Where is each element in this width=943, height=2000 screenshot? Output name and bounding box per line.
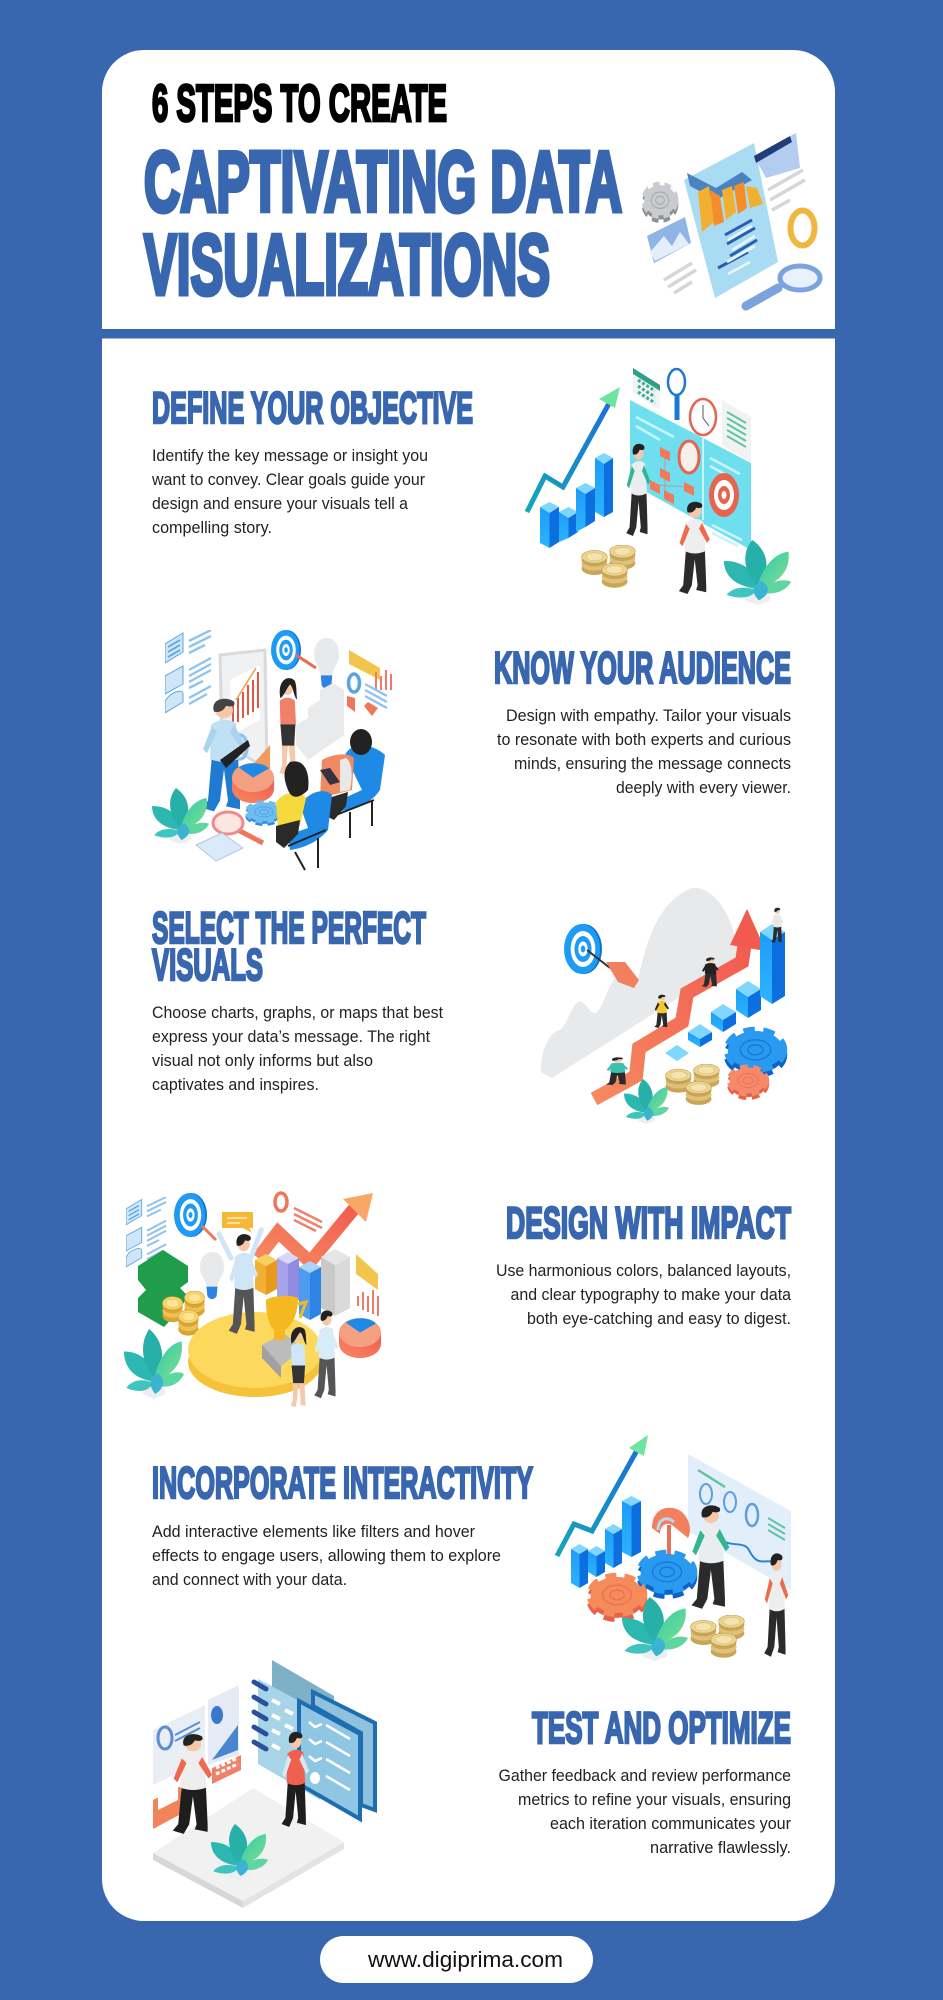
body text: effects to engage users, allowing them to explore [152,1547,501,1565]
bar chart [540,453,613,548]
heading: DEFINE YOUR OBJECTIVE [152,384,473,433]
icon: gear [644,185,676,220]
illustration: achievement podium [124,1193,381,1407]
body text [152,1523,501,1589]
body text: Use harmonious colors, balanced layouts, [496,1262,791,1280]
speech bubble [222,1212,253,1233]
body text: and connect with your data. [152,1571,347,1589]
body text: Choose charts, graphs, or maps that best [152,1004,443,1022]
heading: SELECT THE PERFECT [152,904,426,953]
calendar [212,1755,241,1784]
body text [497,707,791,797]
main title line 2: VISUALIZATIONS [144,218,550,313]
notebook [254,1660,334,1800]
folder [153,1780,181,1829]
dashboard panel [630,400,751,550]
pie chart [339,1318,381,1358]
clock [690,399,716,435]
light bulb [314,638,339,689]
document [722,400,751,462]
trophy [262,1296,306,1378]
panel: step 3 select the perfect visuals [152,888,785,1124]
body text [152,1004,443,1094]
main title line 1: CAPTIVATING DATA [144,135,622,230]
green money stack [138,1250,188,1327]
dashboard board [688,1454,791,1590]
heading [152,904,426,990]
panel: step 5 incorporate interactivity [152,1435,791,1661]
panel: step 6 test and optimize [153,1660,791,1908]
body text: compelling story. [152,519,272,537]
body text: and clear typography to make your data [510,1286,792,1304]
platform [153,1788,344,1908]
body text: visual not only informs but also [152,1052,373,1070]
blue gear [641,1554,693,1595]
illustration: testing checklist [153,1660,375,1908]
plant [124,1329,184,1399]
target [271,630,301,670]
plant [211,1824,268,1880]
presentation board [220,650,270,775]
dart [296,655,316,668]
laptop [220,740,250,768]
standing man [202,699,245,811]
white content card [102,50,835,1921]
person on top [771,908,783,943]
ring and bars [275,1193,322,1231]
calendar [633,368,660,410]
illustration: interactive dashboard [557,1435,791,1661]
body text [496,1262,792,1328]
document [196,833,243,861]
body text [151,447,428,537]
gauge [652,1508,690,1570]
header illustration: report document [644,133,820,306]
body text: Gather feedback and review performance [498,1767,791,1785]
grey mountains [541,888,738,1078]
climbing person [606,1057,628,1085]
person left [173,1734,212,1834]
plant [152,788,209,844]
dart [202,1226,216,1240]
grey text lines [664,170,805,293]
orange gear [730,1068,766,1097]
coins [582,545,635,588]
footer website pill [320,1936,593,1983]
plant [724,540,791,605]
body text: minds, ensuring the message connects [514,755,791,773]
body text: Identify the key message or insight you [152,447,428,465]
illustration: path to target [541,888,785,1124]
document sheet [684,143,778,298]
ring and small charts [347,674,387,716]
pie chart [232,763,274,803]
dart [587,950,639,988]
seated person right [320,729,385,838]
growth arrow [557,1435,648,1556]
rising arrow [258,1193,373,1262]
info cards [165,630,211,713]
info cards [126,1197,166,1267]
icon: photo card [647,217,691,263]
target [174,1193,207,1237]
gear [247,803,281,824]
target [564,924,602,974]
seated person left [276,761,332,870]
panel: step 4 design with impact [124,1193,792,1407]
header title block [144,75,622,313]
rising red arrow [594,909,766,1099]
heading: INCORPORATE INTERACTIVITY [152,1459,533,1508]
gold coins [162,1291,205,1336]
magnifier [213,812,263,843]
person right [282,1732,309,1827]
person with pointer [679,502,710,594]
magnifier [668,369,685,420]
grey bar blocks [296,683,344,760]
subtitle: 6 STEPS TO CREATE [152,75,447,133]
body text: design and ensure your visuals tell a [152,495,409,513]
blue step bars [665,924,785,1061]
folder [349,650,380,680]
runner in yellow [654,995,669,1028]
orange gear [591,1577,643,1618]
heading: VISUALS [152,941,263,990]
tablet [320,768,340,785]
panel: step 1 define your objective [151,368,791,605]
bars [255,1249,350,1320]
red mini chart [358,1290,378,1316]
standing woman [279,678,297,774]
checklist back card [313,1692,375,1810]
illustration: strategy board [527,368,791,605]
magnifier [746,266,820,306]
person at board [626,444,650,536]
body text: Design with empathy. Tailor your visuals [506,707,791,725]
body text: each iteration communicates your [550,1815,791,1833]
body text: narrative flawlessly. [650,1839,791,1857]
blue gear [728,1031,783,1074]
body text: metrics to refine your visuals, ensuring [518,1791,791,1809]
illustration: team meeting [152,630,391,870]
envelope [356,1254,378,1290]
light bulb [200,1252,224,1299]
footer website pill: www.digiprima.com [367,1947,563,1972]
man [314,1311,338,1398]
body text: both eye-catching and easy to digest. [527,1310,791,1328]
panel: step 2 know your audience [152,630,791,870]
yellow podium disc [188,1312,322,1397]
body text: to resonate with both experts and curious [497,731,791,749]
body text: express your data’s message. The right [152,1028,430,1046]
coins [666,1064,719,1105]
body text: deeply with every viewer. [616,779,791,797]
body text: captivates and inspires. [152,1076,319,1094]
plant [622,1597,688,1661]
checklist front card [299,1701,360,1819]
body text: Add interactive elements like filters and hover [152,1523,475,1541]
yellow ring [790,210,814,246]
plant [624,1079,669,1124]
red mini chart [376,670,391,690]
left dashboard panels [153,1685,239,1785]
man with raised arms [218,1228,262,1334]
mini chart card [754,133,800,178]
body text [498,1767,791,1857]
body text: want to convey. Clear goals guide your [151,471,425,489]
coins [691,1615,744,1658]
woman [290,1327,307,1407]
growth arrow [527,387,620,512]
bar chart [571,1496,641,1588]
person at board [692,1505,729,1609]
header divider band [102,329,835,338]
second person [764,1553,788,1657]
runner in black [702,958,719,987]
